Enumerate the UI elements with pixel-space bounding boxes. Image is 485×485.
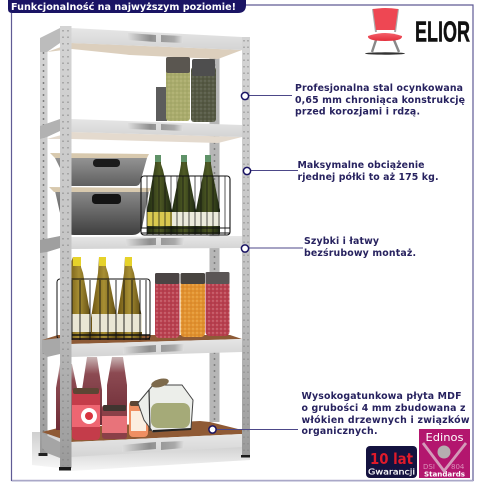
callout text 2: rjednej półki to aż 175 kg. <box>298 172 438 183</box>
header banner: Funkcjonalność na najwyższym poziomie! <box>11 1 236 13</box>
callout text 2: Maksymalne obciążenie <box>298 160 424 171</box>
callout marker 4 <box>209 426 298 433</box>
badge: Edinos DSI 804 standards <box>419 429 470 478</box>
badge: Edinos DSI 804 standards: Standards <box>424 470 465 478</box>
rear posts <box>38 38 220 456</box>
badge: Edinos DSI 804 standards: 804 <box>451 463 465 471</box>
callout text 3: bezśrubowy montaż. <box>304 248 416 259</box>
callout marker 1 <box>241 92 292 100</box>
shelf 4 front face <box>42 338 242 357</box>
badge: 10 lat gwarancji: 10 lat <box>370 450 413 468</box>
callout text 4: włókien drzewnych i związków <box>302 415 470 426</box>
front left post <box>59 26 72 470</box>
products on shelf 3: red and orange jars <box>155 272 230 338</box>
products on shelf 4: tipped glass container <box>138 377 193 432</box>
products on shelf 4: bottles and jars <box>56 357 148 440</box>
floor shadow <box>32 432 250 471</box>
shelf 3 <box>40 236 242 253</box>
front right post <box>241 37 250 458</box>
badge: 10 lat gwarancji: Gwarancji <box>368 468 415 476</box>
products on shelf 1: spice jars <box>156 57 216 122</box>
callout text 1: 0,65 mm chroniąca konstrukcję <box>295 95 465 106</box>
badge: 10 lat gwarancji <box>366 446 417 478</box>
badge: Edinos DSI 804 standards: Edinos <box>426 431 464 444</box>
callout text 3: Szybki i łatwy <box>304 236 379 247</box>
shelf 5 wood top <box>42 421 242 442</box>
shelf 2 <box>40 119 242 143</box>
shelf 1 (top) <box>40 28 242 59</box>
products on shelf 2: green bottles in wire basket <box>141 155 230 235</box>
products on shelf 2: grey storage boxes <box>49 153 151 235</box>
logo: red chair <box>365 8 405 55</box>
shelf 5 front face <box>42 433 242 458</box>
callout text 1: przed korozjami i rdzą. <box>295 106 420 118</box>
callout text 4: Wysokogatunkowa płyta MDF <box>302 391 462 402</box>
callout marker 3 <box>241 245 303 252</box>
callout text 4: o grubości 4 mm zbudowana z <box>302 403 466 414</box>
callout text 4: organicznych. <box>302 426 378 437</box>
shelf 4 wood top <box>42 335 242 344</box>
products on shelf 3: amber bottles in wire basket <box>57 257 150 340</box>
callout text 1: Profesjonalna stal ocynkowana <box>295 83 463 94</box>
callout marker 2 <box>243 167 298 175</box>
badge: Edinos DSI 804 standards: DSI <box>423 463 435 471</box>
